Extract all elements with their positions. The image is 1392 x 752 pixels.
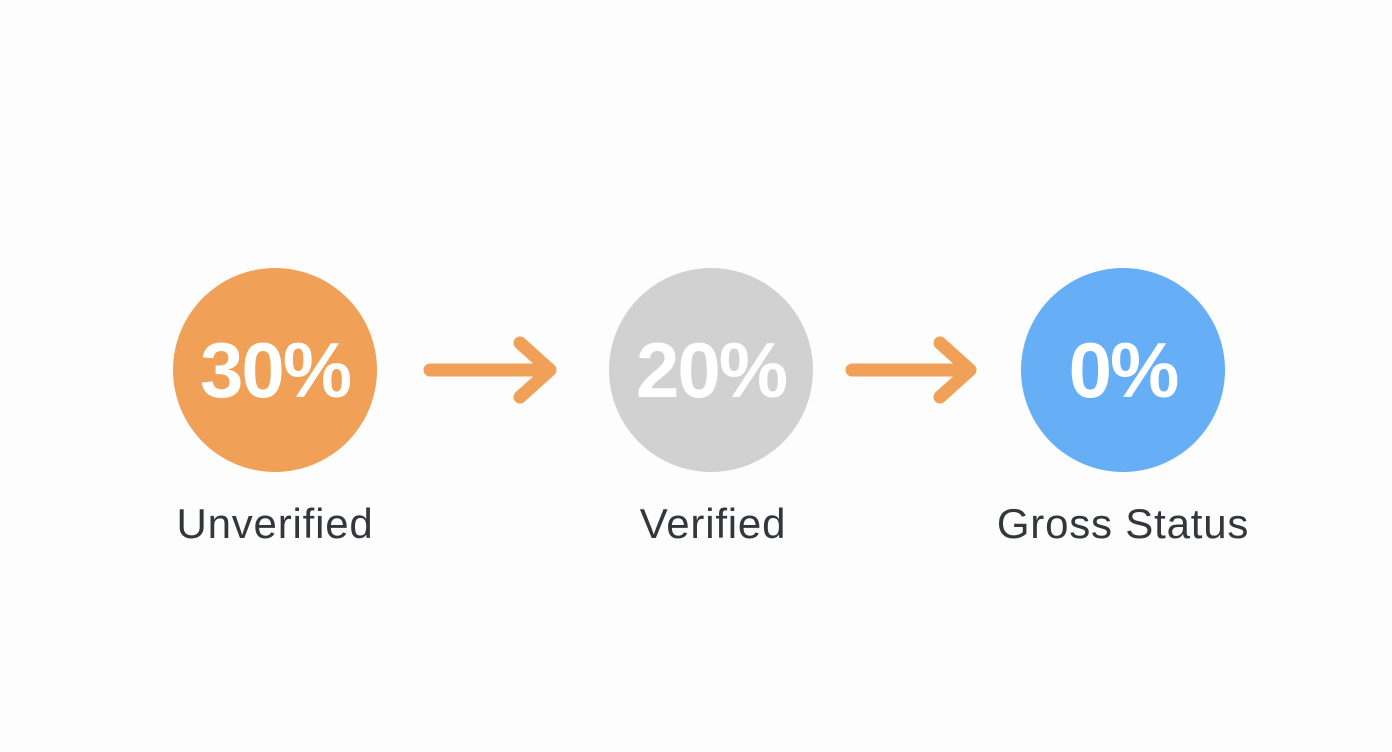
circle: 20% verified: 20% (636, 326, 786, 414)
label: Verified: Verified (640, 500, 786, 547)
circle: 30% unverified: 30% (200, 326, 350, 414)
circle: 0% gross status (1021, 268, 1225, 472)
arrow 2 (846, 336, 976, 404)
circle: 0% gross status: 0% (1069, 326, 1177, 414)
circle: 30% unverified (173, 268, 377, 472)
label: Unverified: Unverified (176, 500, 374, 547)
label: Gross Status: Gross Status (997, 500, 1249, 547)
arrow 1 (424, 336, 556, 404)
circle: 20% verified (609, 268, 813, 472)
